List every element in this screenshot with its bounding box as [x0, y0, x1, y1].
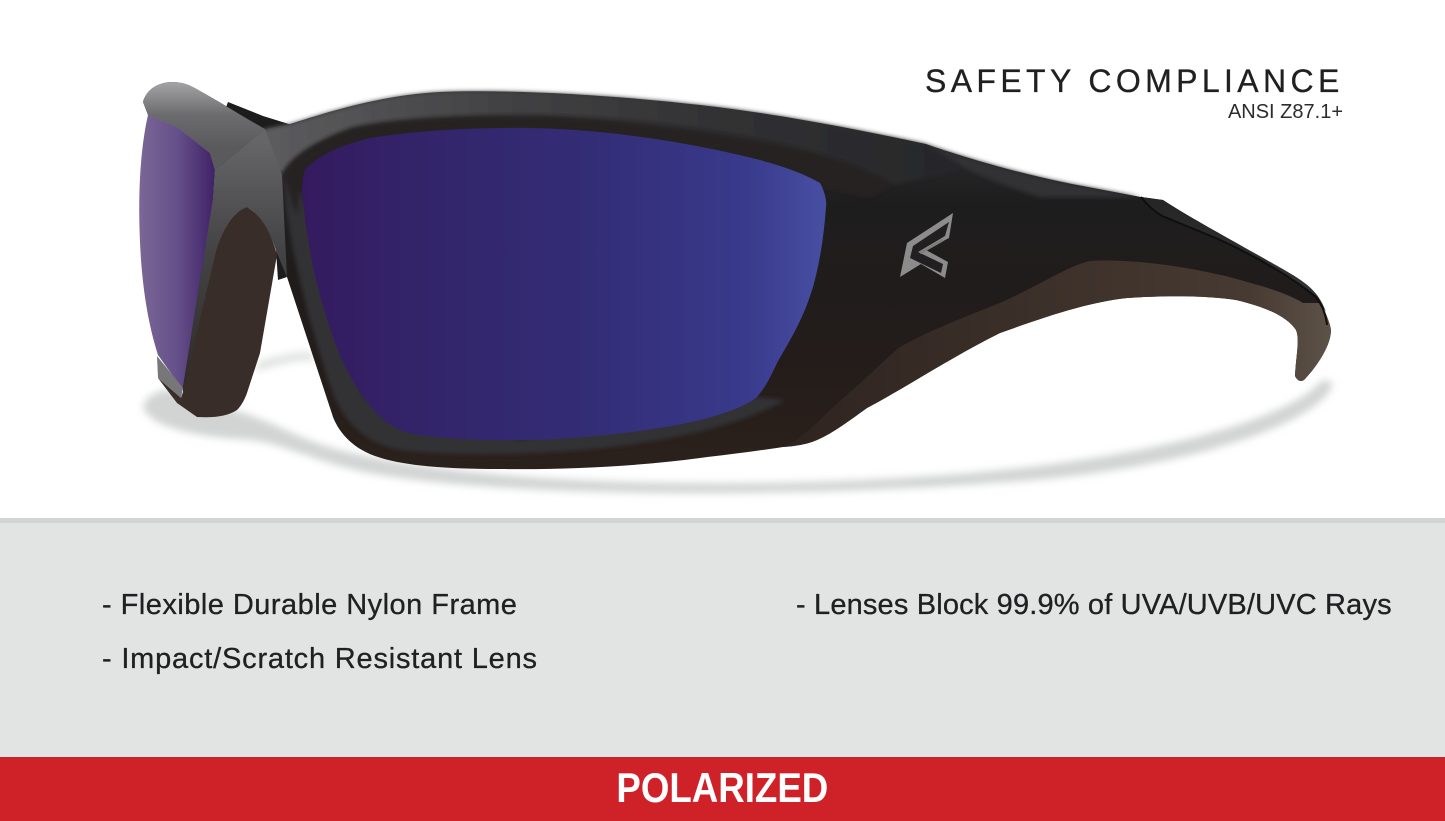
logo mark — [900, 213, 953, 278]
side lens — [139, 115, 215, 390]
banner: polarized — [0, 757, 1445, 821]
top rim grey — [240, 91, 960, 185]
ground shadow — [143, 352, 1333, 493]
heading: safety compliance: SAFETY COMPLIANCE — [925, 63, 1344, 99]
arm lower brown band — [783, 261, 1331, 447]
brow highlight — [143, 82, 265, 170]
compliance standard: ANSI Z87.1+ — [1228, 101, 1343, 123]
feature: UV protection: - Lenses Block 99.9% of UVA/UVB/UVC Rays — [796, 589, 1392, 621]
arm upper highlight — [926, 144, 1141, 197]
frame and temple arm — [143, 82, 1331, 469]
arm top surface — [1141, 197, 1326, 312]
lower grey lens band — [283, 175, 785, 454]
side bar grey — [183, 129, 287, 393]
feature: nylon frame: - Flexible Durable Nylon Frame — [102, 589, 517, 621]
top rim dark brown — [283, 116, 892, 215]
temple strip behind brow — [225, 102, 292, 280]
front lens — [302, 128, 826, 440]
banner: polarized: POLARIZED — [617, 764, 828, 811]
nose pad — [158, 207, 277, 417]
feature: lens: - Impact/Scratch Resistant Lens — [102, 643, 538, 675]
panel: features — [0, 518, 1445, 757]
product image: sunglasses — [139, 82, 1334, 496]
bottom silver corner — [157, 356, 183, 398]
